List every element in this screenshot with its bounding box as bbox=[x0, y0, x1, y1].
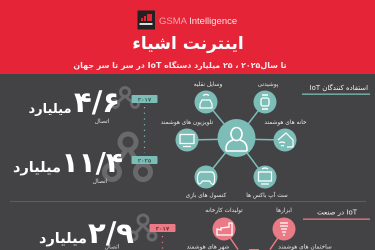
label: set-top box: ست آپ باکس ها bbox=[246, 191, 288, 199]
stat: 2025 connections bbox=[13, 146, 123, 185]
stat: 2025 connections: میلیارد bbox=[13, 160, 61, 176]
icon: connection nodes industrial bbox=[129, 215, 156, 240]
heading: consumer IoT: استفاده کنندگان IoT bbox=[310, 83, 368, 92]
icon: utilities bulb bbox=[272, 218, 296, 240]
icon: connection nodes 2025 bbox=[104, 134, 150, 180]
stat: 2025 connections: اتصال bbox=[93, 178, 108, 185]
icon: smart car bbox=[194, 90, 218, 114]
stat: 2017 connections: اتصال bbox=[95, 118, 110, 125]
stat: industrial connections: ۲/۹ bbox=[88, 216, 134, 250]
logo wordmark: GSMA Intelligence bbox=[159, 16, 237, 27]
label: smart car: وسایل نقلیه bbox=[194, 82, 222, 88]
stat: 2017 connections: ۴/۶ bbox=[74, 85, 120, 119]
label: factory: تولیدات کارخانه bbox=[205, 207, 243, 214]
timeline 2017 industrial: ۲۰۱۷ bbox=[156, 226, 170, 232]
timeline 2017 industrial bbox=[150, 224, 176, 250]
connector lines industrial bbox=[224, 229, 284, 250]
panel: industrial IoT bbox=[39, 207, 370, 250]
heading: industrial IoT: IoT در صنعت bbox=[317, 208, 358, 216]
icon: GSMA logo bbox=[138, 10, 155, 30]
icon: set-top box bbox=[254, 166, 276, 188]
label: wearable: پوشیدنی bbox=[258, 82, 279, 88]
timeline 2017 to 2025 bbox=[132, 95, 158, 164]
label: game console: کنسول های بازی bbox=[186, 192, 227, 199]
heading: consumer IoT bbox=[302, 83, 370, 95]
timeline 2017 to 2025: ۲۰۱۷ bbox=[138, 98, 152, 104]
label: smart home: خانه های هوشمند bbox=[264, 120, 307, 126]
title: اینترنت اشیاء bbox=[132, 34, 244, 54]
header panel bbox=[0, 0, 375, 74]
panel: consumer IoT bbox=[13, 82, 370, 199]
icon: game console bbox=[194, 166, 218, 188]
label: utilities: ابزارها bbox=[276, 208, 292, 214]
connector lines bbox=[187, 102, 285, 177]
stat: industrial connections: میلیارد bbox=[39, 231, 87, 247]
icon: connection nodes 2017 bbox=[112, 88, 138, 108]
heading: industrial IoT bbox=[303, 208, 370, 220]
icon: wearable watch bbox=[254, 90, 276, 114]
stat: 2017 connections bbox=[28, 85, 120, 125]
timeline 2017 to 2025: ۲۰۲۵ bbox=[138, 158, 152, 164]
icon: smart TV bbox=[176, 128, 198, 152]
stat: 2025 connections: ۱۱/۴ bbox=[62, 146, 123, 179]
icon: factory bbox=[212, 218, 236, 240]
subtitle: تا سال۲۰۲۵ ، ۲۵ میلیارد دستگاه IoT در سر تا سر جهان bbox=[73, 60, 287, 70]
divider bbox=[10, 200, 366, 202]
stat: 2017 connections: میلیارد bbox=[28, 102, 72, 117]
icon: user hub bbox=[218, 119, 256, 157]
icon: smart home bbox=[274, 128, 296, 152]
stat: industrial connections bbox=[39, 216, 134, 250]
label: smart TV: تلویزیون های هوشمند bbox=[161, 120, 214, 126]
hub: industrial bbox=[249, 249, 259, 250]
